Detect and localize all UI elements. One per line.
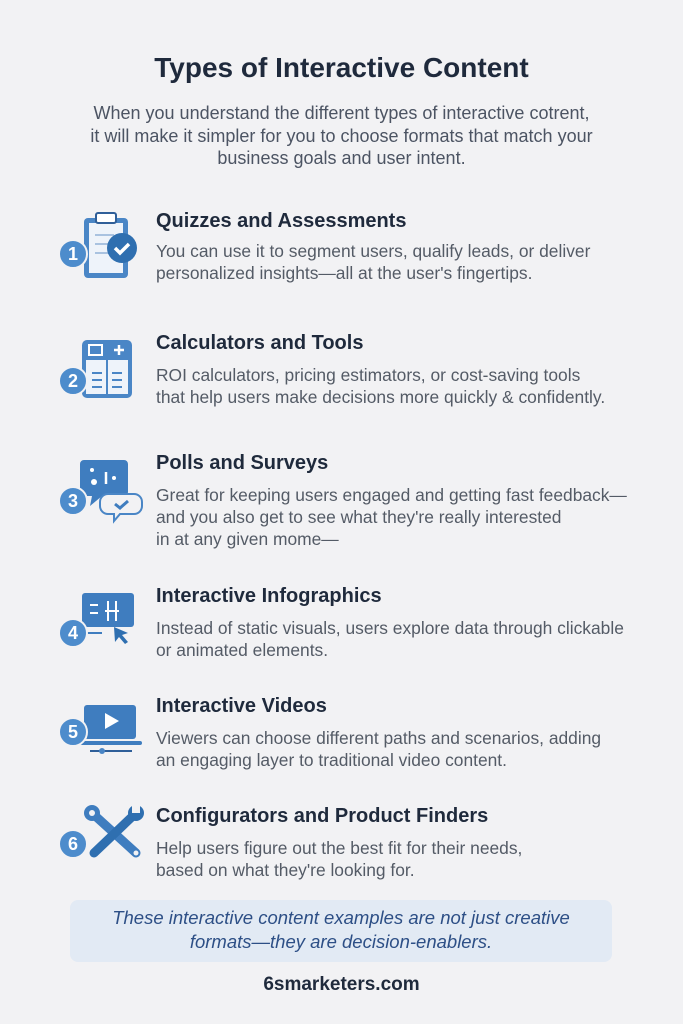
intro text	[90, 103, 593, 168]
number 4: 4	[68, 623, 78, 643]
item 3: polls	[60, 452, 627, 549]
number 1: 1	[68, 244, 78, 264]
footer: 6smarketers.com	[263, 974, 420, 995]
heading: Quizzes and Assessments	[156, 210, 406, 232]
heading: Polls and Surveys	[156, 452, 328, 474]
callout	[70, 900, 612, 962]
text: an engaging layer to traditional video content.	[156, 750, 507, 770]
item 4: infographics	[60, 585, 624, 660]
heading: Calculators and Tools	[156, 332, 363, 354]
number 5: 5	[68, 722, 78, 742]
intro text: it will make it simpler for you to choose formats that match your	[90, 126, 593, 146]
text: personalized insights—all at the user's fingertips.	[156, 263, 532, 283]
number 6	[58, 829, 88, 859]
icon: video laptop	[80, 705, 142, 754]
text: Instead of static visuals, users explore data through clickable	[156, 618, 624, 638]
text: Help users figure out the best fit for their needs,	[156, 838, 522, 858]
icon: calculator	[82, 340, 132, 398]
text: and you also get to see what they're really interested	[156, 507, 561, 527]
text	[156, 618, 624, 660]
number 1	[58, 239, 88, 269]
number 4	[58, 618, 88, 648]
number 5	[58, 717, 88, 747]
text	[156, 728, 601, 770]
text: that help users make decisions more quickly & confidently.	[156, 387, 605, 407]
callout: These interactive content examples are not just creative	[112, 907, 570, 928]
heading: Interactive Infographics	[156, 585, 382, 607]
icon: clipboard	[84, 212, 137, 278]
heading: Interactive Videos	[156, 695, 327, 717]
icon: wrench and screwdriver	[84, 805, 144, 858]
callout: formats—they are decision-enablers.	[190, 931, 492, 952]
title: Types of Interactive Content	[154, 52, 529, 83]
text: You can use it to segment users, qualify leads, or deliver	[156, 241, 590, 261]
item 1: quizzes	[60, 210, 590, 283]
number 3: 3	[68, 491, 78, 511]
text: based on what they're looking for.	[156, 860, 415, 880]
number 6: 6	[68, 834, 78, 854]
text	[156, 241, 590, 283]
number 2: 2	[68, 371, 78, 391]
text: Great for keeping users engaged and getting fast feedback—	[156, 485, 627, 505]
icon: chat bubbles	[80, 460, 143, 524]
text	[156, 838, 522, 880]
text: or animated elements.	[156, 640, 328, 660]
text: ROI calculators, pricing estimators, or cost-saving tools	[156, 365, 580, 385]
item 6: configurators	[60, 805, 522, 880]
item 5: videos	[60, 695, 601, 770]
text: Viewers can choose different paths and scenarios, adding	[156, 728, 601, 748]
text	[156, 365, 605, 407]
heading: Configurators and Product Finders	[156, 805, 488, 827]
text: in at any given mome—	[156, 529, 339, 549]
number 3	[58, 486, 88, 516]
number 2	[58, 366, 88, 396]
text	[156, 485, 627, 549]
icon: screen with cursor	[82, 593, 134, 644]
intro text: business goals and user intent.	[217, 148, 466, 168]
item 2: calculators	[60, 332, 605, 407]
intro text: When you understand the different types of interactive cotrent,	[94, 103, 589, 123]
